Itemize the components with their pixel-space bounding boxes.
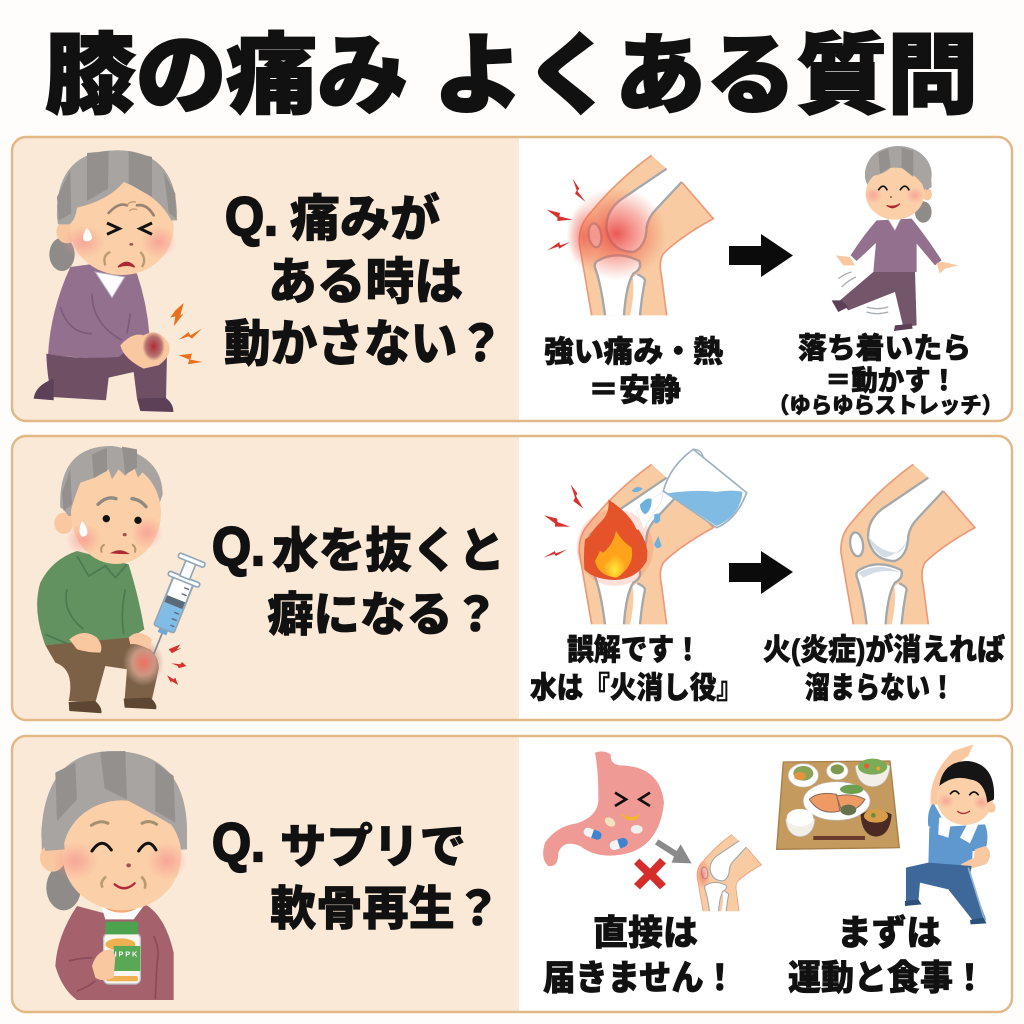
arrow: [729, 551, 793, 594]
illustration: grandfather with syringe in knee: [37, 446, 208, 713]
question 2 text: [212, 515, 505, 641]
panel 1 background: [12, 137, 1012, 421]
question 3 text: 軟骨再生？: [270, 882, 501, 935]
illustration: man stretching: [905, 744, 996, 924]
caption: does not reach directly: [543, 914, 736, 998]
caption: strong pain and heat means rest: ＝安静: [588, 373, 681, 408]
panel 3 background: [12, 736, 1012, 1012]
caption: misconception, water is the firefighter: 水は『火消し役』: [530, 672, 743, 705]
question 1 text: ある時は: [268, 254, 463, 310]
caption: misconception, water is the firefighter: [530, 634, 743, 705]
caption: strong pain and heat means rest: 強い痛み・熱: [544, 336, 723, 369]
icon: red cross: [634, 858, 666, 889]
question 1 text: [224, 185, 504, 372]
caption: first exercise and diet: まずは: [837, 914, 941, 953]
icon: grey arrow to knee: [655, 839, 692, 863]
panel: supplements question 3: [12, 736, 1012, 1012]
caption: no build up when fire goes out: 火(炎症)が消えれば: [763, 633, 1005, 667]
panel: water in the knee question 2: [12, 436, 1012, 720]
caption: no build up when fire goes out: 溜まらない！: [805, 672, 955, 705]
caption: does not reach directly: 届きません！: [543, 959, 736, 998]
question 3 text: [212, 811, 501, 935]
caption: move when calm: 落ち着いたら: [798, 332, 971, 365]
panel 2 background: [12, 436, 1012, 720]
caption: first exercise and diet: [788, 914, 986, 998]
caption: move when calm: ＝動かす！: [825, 365, 957, 396]
illustration: stomach with pills, knee and cross: [543, 751, 761, 911]
question 1 text: 動かさない？: [224, 316, 504, 372]
question 2 text: Q.: [212, 515, 265, 577]
question 2 text: 癖になる？: [267, 588, 499, 641]
question 3 text: Q.: [212, 811, 265, 873]
illustration: grandmother holding painful knee: [34, 150, 203, 412]
caption: move when calm: （ゆらゆらストレッチ）: [768, 393, 1003, 418]
caption: first exercise and diet: 運動と食事！: [788, 959, 986, 998]
arrow: [729, 234, 793, 277]
caption: move when calm: [768, 332, 1003, 418]
illustration: Japanese set meal on a tray: [777, 759, 899, 849]
caption: strong pain and heat means rest: [544, 336, 723, 408]
illustration: knee with fire and water: [543, 449, 747, 624]
panel: knee pain question 1: [12, 137, 1012, 421]
title: 膝の痛み よくある質問: [45, 26, 978, 125]
illustration: healthy knee: [841, 464, 975, 624]
illustration: grandmother with supplement bottle: [40, 751, 188, 1000]
question 3 text: サプリで: [280, 820, 466, 873]
illustration: grandmother with supplement bottle: IPPK: [115, 950, 138, 959]
caption: no build up when fire goes out: [763, 633, 1005, 705]
caption: does not reach directly: 直接は: [593, 914, 698, 953]
question 1 text: Q.: [225, 185, 278, 247]
question 2 text: 水を抜くと: [272, 525, 505, 578]
caption: misconception, water is the firefighter: 誤解です！: [567, 634, 701, 667]
question 1 text: 痛みが: [290, 191, 440, 247]
illustration: inflamed knee: [547, 155, 713, 315]
illustration: grandmother swinging her leg: [832, 146, 958, 331]
